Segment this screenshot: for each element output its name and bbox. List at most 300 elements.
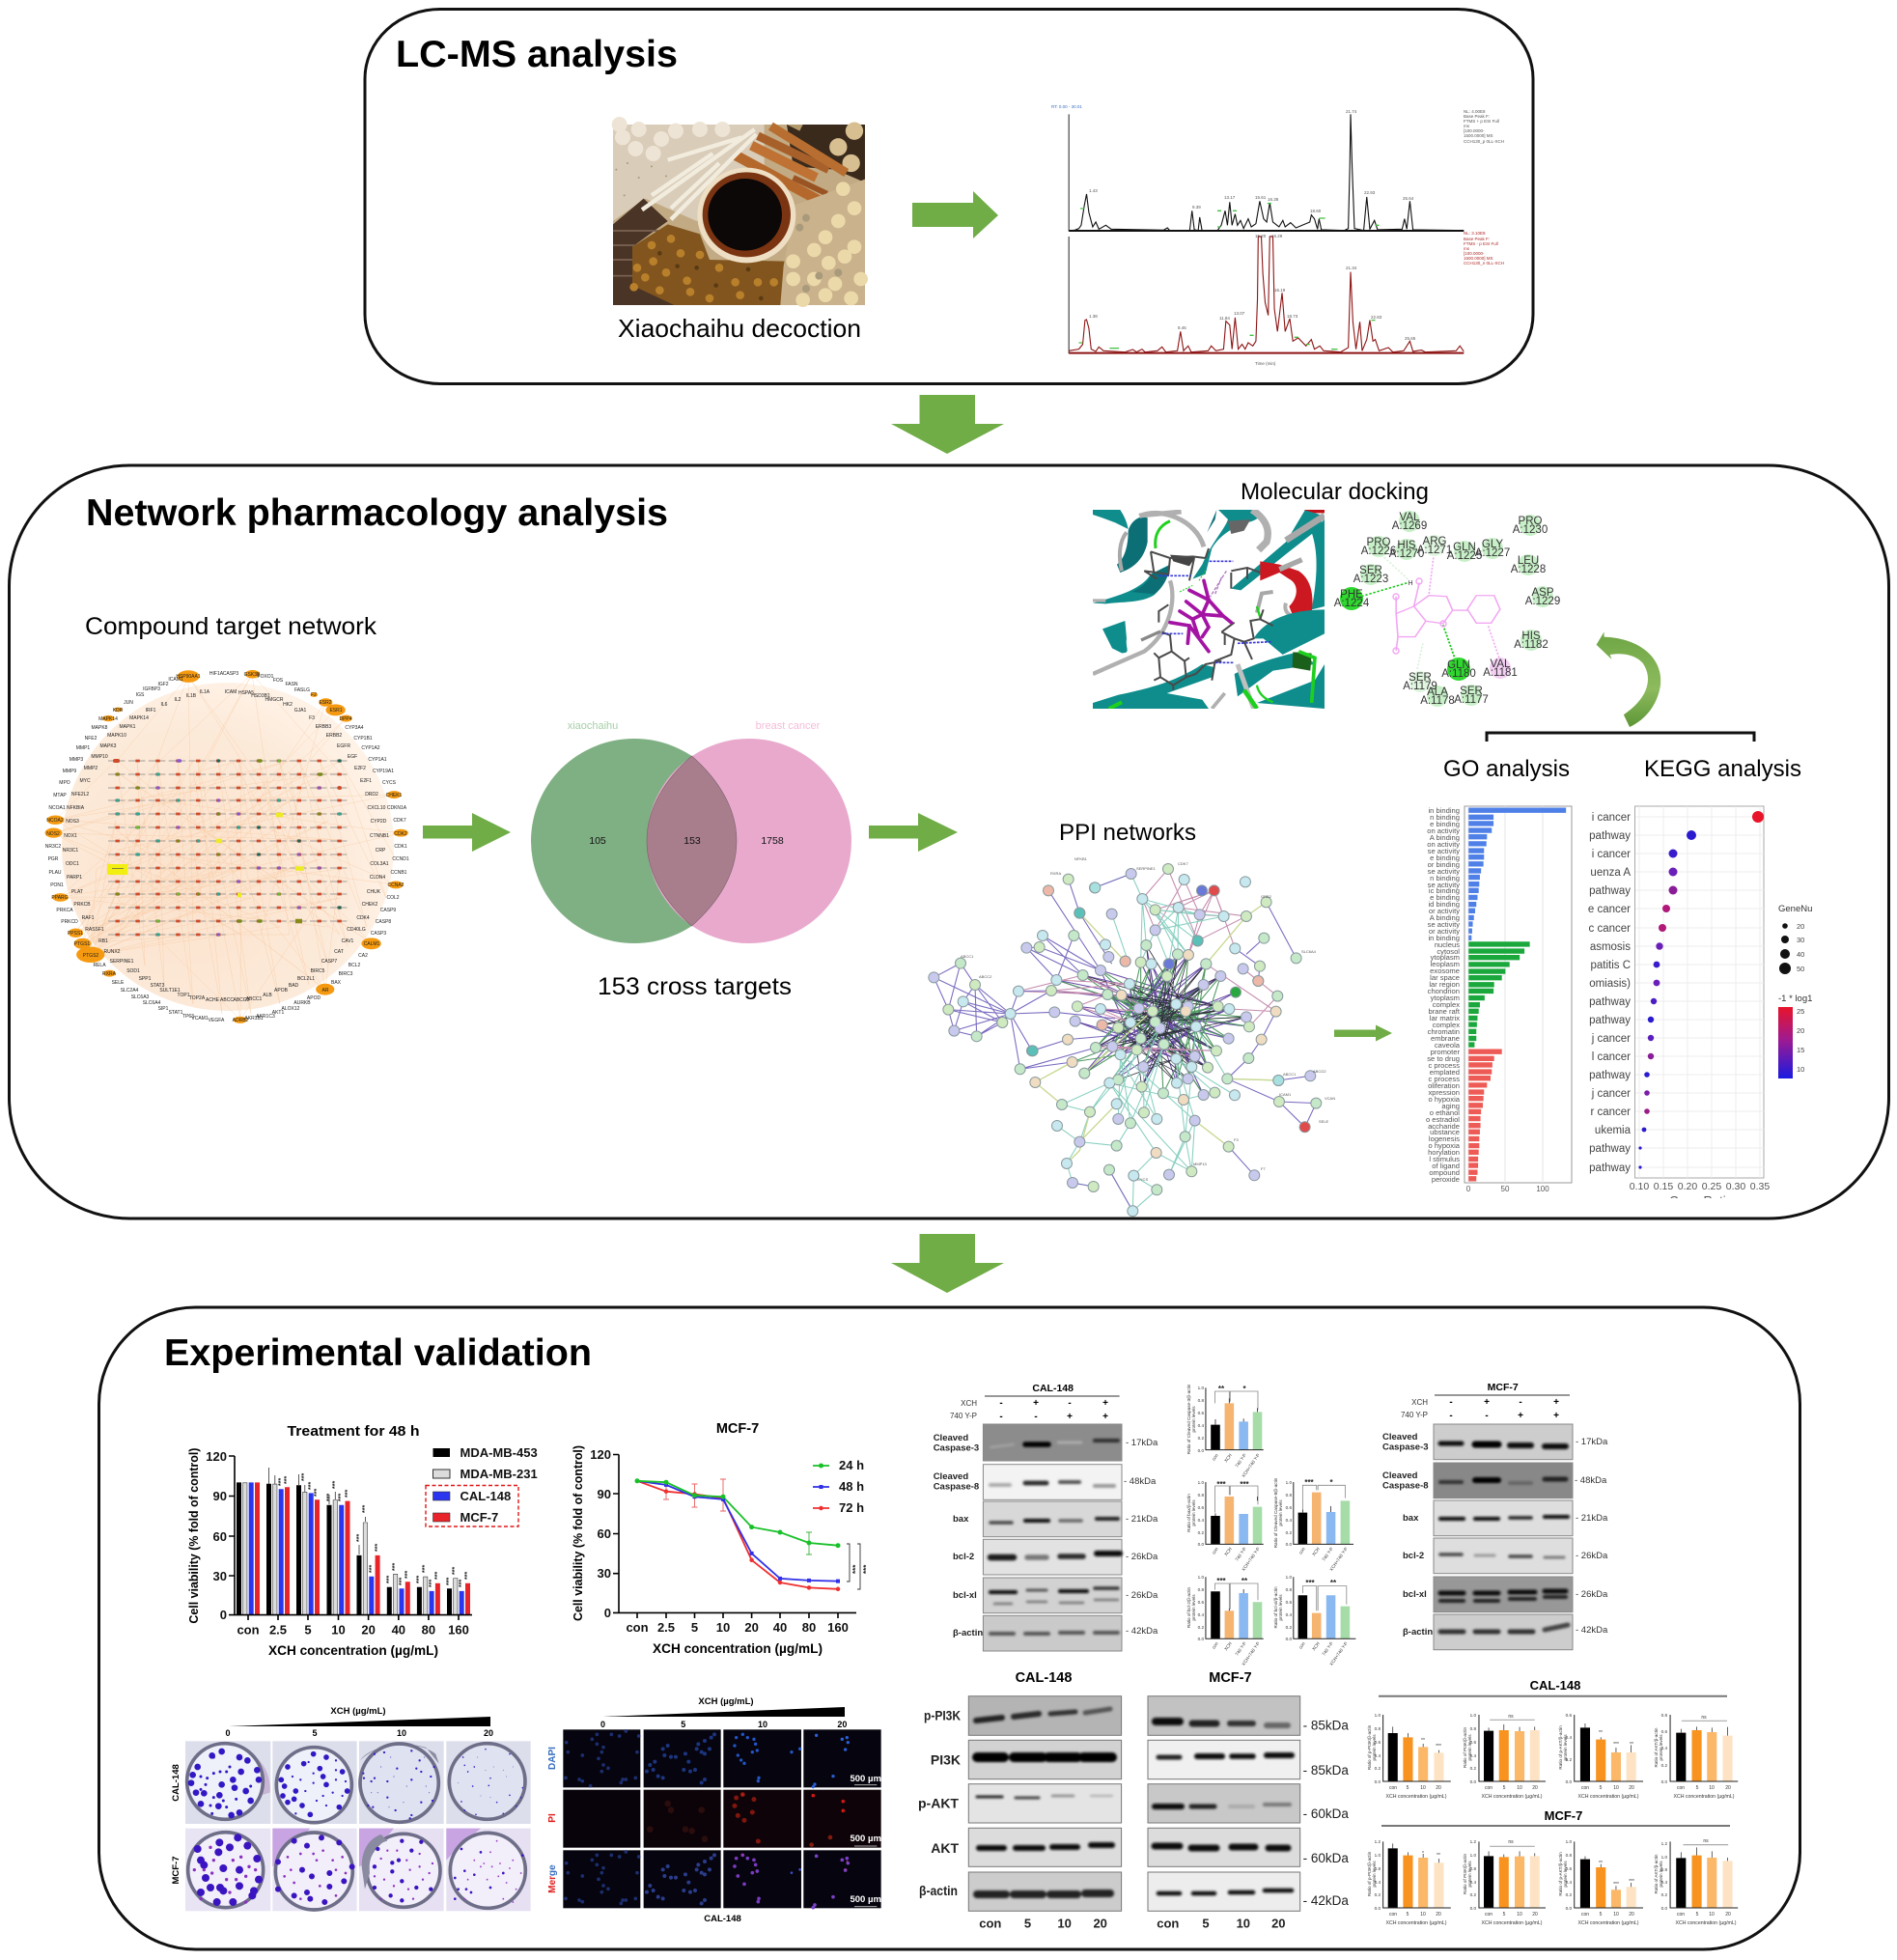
chart: KEGG dot plot: 0.20 (1678, 1181, 1697, 1192)
chart: apoptosis protein ratio bars: 0.8 (1286, 1587, 1292, 1592)
chart: PI3K/AKT protein ratio bars: 0.2 (1661, 1892, 1667, 1897)
legend: colour scale: 25 (1797, 1007, 1804, 1016)
arrow: herbs to chromatogram (912, 191, 998, 238)
figure: DAPI and PI fluorescence staining: 0 (600, 1720, 605, 1729)
chart: PI3K/AKT protein ratio bars: 1.2 (1661, 1841, 1667, 1846)
chart: PI3K/AKT protein ratio bars: 0.0 (1661, 1779, 1667, 1784)
chart: PI3K/AKT protein ratio bars: Ratio of PI3K/β-actin (1463, 1726, 1467, 1768)
figure: western blot MCF-7, caspase panel: - (1485, 1411, 1489, 1421)
chart: PI3K/AKT protein ratio bars: 0.8 (1375, 1726, 1381, 1731)
figure: colony formation plates: 5 (312, 1728, 318, 1738)
chart: GO bar chart: accharide (1428, 1122, 1460, 1131)
chart: apoptosis protein ratio bars: 0.2 (1198, 1436, 1204, 1441)
figure: western blot CAL-148 and MCF-7, PI3K/AKT: - 85kDa (1303, 1763, 1349, 1778)
chart: apoptosis protein ratio bars: 0.0 (1198, 1448, 1204, 1453)
chart: LC-MS chromatograms: 8.45 (1178, 325, 1186, 330)
chart: compound target network: RUNX2 (104, 949, 121, 955)
chart: GO bar chart: caveola (1435, 1041, 1461, 1050)
diagram: 2D ligand interactions: HIS (1521, 630, 1541, 642)
diagram: 2D ligand interactions: A:1180 (1441, 668, 1476, 680)
chart: KEGG dot plot: 0.30 (1726, 1181, 1745, 1192)
chart: PI3K/AKT protein ratio bars: Ratio of AKT/β-actin (1654, 1727, 1659, 1767)
chart: compound target network: MMP3 (70, 757, 83, 763)
chart: PI3K/AKT protein ratio bars: *** (1436, 1744, 1441, 1750)
chart: compound target network: IRF1 (146, 708, 156, 714)
chart: PPI network: ABCC1 (1283, 1072, 1297, 1077)
chart: apoptosis protein ratio bars: 0.8 (1198, 1587, 1204, 1592)
chart: compound target network: CTNNB1 (370, 833, 389, 839)
label: Compound target network: Compound target network (85, 613, 377, 640)
legend: colour scale: -1 * log1 (1778, 994, 1812, 1004)
chart: PPI network: NFKB1 (1074, 856, 1088, 861)
chart: KEGG dot plot: 0.35 (1750, 1181, 1770, 1192)
chart: LC-MS chromatograms: 16.19 (1274, 288, 1286, 293)
chart: compound target network: DPP4 (339, 716, 352, 722)
chart: GO bar chart: e binding (1430, 893, 1460, 902)
chart: LC-MS chromatograms: 16.38 (1268, 197, 1279, 202)
chart: compound target network: RXRA (102, 971, 117, 977)
figure: western blot CAL-148, caspase panel: 740 Y-P (950, 1412, 977, 1420)
chart: cell viability bars, 48 h: *** (375, 1544, 381, 1552)
legend: colour scale: 20 (1797, 1026, 1804, 1035)
heading: Network pharmacology analysis: Network pharmacology analysis (86, 492, 668, 534)
diagram: 2D ligand interactions: SER (1359, 565, 1382, 576)
figure: western blot MCF-7, caspase panel: - 48kDa (1575, 1475, 1607, 1486)
chart: MCF-7 viability lines (571, 1421, 871, 1656)
chart: PPI network: VCAN (1325, 1096, 1335, 1101)
chart: apoptosis protein ratio bars: 1.0 (1198, 1386, 1204, 1390)
chart: LC-MS chromatograms: [100.0000- (1464, 251, 1485, 256)
chart: compound target network: SOD1 (126, 968, 140, 974)
chart: cell viability bars, 48 h: *** (464, 1572, 471, 1580)
diagram: 2D ligand interactions: PRO (1519, 516, 1543, 527)
chart: compound target network: HSD3B1 (251, 693, 270, 699)
chart: MCF-7 viability lines: 40 (773, 1620, 787, 1635)
chart: PI3K/AKT protein ratio bars: protein levels (1659, 1734, 1663, 1761)
bracket: GO and KEGG (1487, 733, 1754, 742)
legend: colour scale (1778, 994, 1812, 1078)
chart: KEGG dot plot: 0.10 (1630, 1181, 1649, 1192)
chart: cell viability bars, 48 h: *** (405, 1571, 411, 1579)
chart: LC-MS chromatograms (1051, 104, 1504, 366)
chart: PI3K/AKT protein ratio bars: Ratio of p-PI3K/β-actin (1367, 1724, 1372, 1770)
figure: colony formation plates: 0 (225, 1728, 231, 1738)
chart: compound target network (45, 670, 409, 1023)
chart: compound target network: CASP9 (380, 908, 396, 913)
figure: western blot MCF-7, caspase panel: - 26kDa (1576, 1589, 1608, 1600)
chart: apoptosis protein ratio bars: Ratio of Cleaved Caspase-8/β-actin (1273, 1477, 1278, 1548)
chart: LC-MS chromatograms: 1.38 (1089, 314, 1098, 319)
figure: western blot MCF-7, caspase panel: + (1484, 1397, 1490, 1408)
chart: compound target network: CHEK2 (362, 902, 378, 908)
chart: compound target network: HMGCR (265, 697, 284, 703)
chart: LC-MS chromatograms: [100.0000- (1464, 128, 1485, 133)
chart: PPI network: SELE (1319, 1119, 1329, 1124)
chart: compound target network: CDK7 (393, 818, 406, 824)
chart: LC-MS chromatograms: 1.43 (1089, 188, 1098, 193)
chart: PI3K/AKT protein ratio bars: Ratio of p-AKT/β-actin (1558, 1852, 1563, 1896)
chart: LC-MS chromatograms: CCH130_n 0LL-XCH (1464, 261, 1504, 266)
chart: apoptosis protein ratio bars: *** (1304, 1478, 1315, 1487)
panel: Experimental validation (98, 1307, 1799, 1949)
chart: compound target network: ESR1 (329, 708, 343, 714)
chart: GO bar chart: nucleus (1435, 940, 1460, 949)
chart: compound target network: MTAP (53, 793, 67, 798)
chart: PI3K/AKT protein ratio bars: 5 (1600, 1912, 1603, 1918)
chart: compound target network: PLAU (48, 870, 62, 876)
chart: compound target network: STAT1 (169, 1010, 183, 1016)
chart: GO bar chart: c process (1429, 1061, 1460, 1070)
chart: GO bar chart: se activity (1428, 920, 1460, 929)
chart: PI3K/AKT protein ratio bars: 0.4 (1566, 1880, 1572, 1885)
chart: apoptosis protein ratio bars: protein levels (1278, 1594, 1283, 1621)
chart: compound target network: PTGS1 (74, 941, 90, 947)
chart: GO bar chart: ompound (1429, 1168, 1460, 1177)
chart: compound target network: MMP10 (91, 754, 108, 760)
chart: PI3K/AKT protein ratio bars: ** (1630, 1742, 1633, 1748)
chart: PI3K/AKT protein ratio bars: ns (1703, 1838, 1709, 1844)
chart: GO bar chart: leoplasm (1431, 960, 1460, 968)
chart: LC-MS chromatograms: 25.65 (1405, 336, 1416, 341)
label: Venn counts: 1758 (761, 835, 784, 847)
chart: PI3K/AKT protein ratio bars: 0.6 (1661, 1729, 1667, 1734)
legend: cell lines: CAL-148 (460, 1489, 511, 1503)
chart: PPI network: CYCS (1137, 1177, 1148, 1182)
panel: LC-MS analysis (365, 10, 1533, 384)
chart: MCF-7 viability lines: 24 h (839, 1458, 864, 1472)
figure: western blot MCF-7, caspase panel: - 17kDa (1576, 1437, 1608, 1447)
chart: PI3K/AKT protein ratio bars (1367, 1678, 1738, 1926)
figure: DAPI and PI fluorescence staining: 20 (837, 1720, 847, 1729)
chart: compound target network: RELA (93, 963, 106, 968)
figure: western blot CAL-148 and MCF-7, PI3K/AKT: - 42kDa (1303, 1893, 1349, 1908)
chart: MCF-7 viability lines: *** (862, 1564, 871, 1574)
chart: MCF-7 viability lines: 120 (590, 1447, 611, 1462)
chart: compound target network: HK2 (283, 702, 293, 708)
chart: PI3K/AKT protein ratio bars: con (1677, 1912, 1685, 1918)
chart: compound target network: VCAM1 (191, 1016, 209, 1022)
chart: PPI network: ICAM1 (1279, 1092, 1292, 1097)
chart: compound target network: CA2 (358, 953, 368, 959)
chart: compound target network: MAPK14 (129, 715, 149, 721)
chart: compound target network: BAD (289, 983, 299, 989)
chart: KEGG dot plot: pathway (1589, 1143, 1631, 1155)
chart: apoptosis protein ratio bars: 0.0 (1286, 1637, 1292, 1641)
figure: western blot MCF-7, caspase panel: - (1519, 1397, 1522, 1408)
chart: PI3K/AKT protein ratio bars: 0.6 (1470, 1740, 1476, 1745)
chart: LC-MS chromatograms: NL: 4.00E8 (1464, 109, 1486, 114)
legend: gene number: 40 (1797, 950, 1804, 959)
arrow: LC-MS to network pharmacology (891, 395, 1004, 454)
chart: apoptosis protein ratio bars: 0.6 (1198, 1505, 1204, 1510)
figure: western blot MCF-7, caspase panel: + (1553, 1397, 1559, 1408)
chart: MCF-7 viability lines: con (626, 1620, 649, 1635)
chart: PI3K/AKT protein ratio bars: 20 (1629, 1785, 1634, 1791)
chart: PI3K/AKT protein ratio bars: 10 (1709, 1785, 1715, 1791)
chart: cell viability bars, 48 h: *** (284, 1476, 291, 1484)
label: GO analysis: GO analysis (1443, 756, 1570, 782)
chart: PI3K/AKT protein ratio bars: Ratio of PI3K/β-actin (1463, 1853, 1467, 1894)
chart: apoptosis protein ratio bars: Ratio of bax/β-actin (1186, 1494, 1191, 1532)
chart: GO bar chart: complex (1433, 1000, 1460, 1009)
chart: KEGG dot plot (1588, 806, 1812, 1208)
chart: cell viability bars, 48 h: *** (308, 1482, 315, 1490)
chart: LC-MS chromatograms: 1500.0000] MS (1464, 133, 1493, 138)
figure: western blot MCF-7, caspase panel: β-actin (1403, 1627, 1433, 1638)
chart: apoptosis protein ratio bars: 1.0 (1198, 1575, 1204, 1580)
chart: GO bar chart: lar space (1430, 973, 1460, 982)
chart: PI3K/AKT protein ratio bars: CAL-148 (1530, 1678, 1580, 1693)
chart: compound target network: ICAM (225, 689, 237, 695)
chart: compound target network: PPSS1 (68, 931, 83, 937)
figure: western blot MCF-7, caspase panel: - (1449, 1411, 1453, 1421)
chart: MCF-7 viability lines: 80 (802, 1620, 816, 1635)
chart: compound target network: PTGS2 (83, 953, 98, 959)
chart: compound target network: SELE (112, 980, 125, 986)
chart: cell viability bars, 48 h: 90 (213, 1489, 227, 1503)
chart: PI3K/AKT protein ratio bars: 0.0 (1566, 1779, 1572, 1784)
arrow: network to Venn (423, 813, 511, 852)
diagram: 2D ligand interactions: A:1179 (1403, 681, 1437, 692)
chart: compound target network: VEGFA (209, 1018, 225, 1023)
chart: PI3K/AKT protein ratio bars: 1.0 (1470, 1853, 1476, 1858)
chart: compound target network: PGR (48, 856, 59, 862)
chart: GO bar chart (1426, 806, 1572, 1193)
chart: PI3K/AKT protein ratio bars: 5 (1696, 1785, 1699, 1791)
chart: GO bar chart: se activity (1428, 847, 1460, 855)
diagram: 2D ligand interactions: A:1177 (1454, 694, 1489, 706)
chart: cell viability bars, 48 h: *** (332, 1481, 339, 1489)
text: 153 cross targets: 153 cross targets (598, 973, 792, 1000)
chart: KEGG dot plot: c cancer (1589, 923, 1631, 935)
chart: MCF-7 viability lines: 72 h (839, 1500, 864, 1515)
image: herbs and decoction bowl (613, 125, 865, 305)
chart: compound target network: RASSF1 (85, 927, 104, 933)
figure: western blot CAL-148 and MCF-7, PI3K/AKT: 10 (1057, 1917, 1072, 1931)
chart: KEGG dot plot: patitis C (1590, 960, 1631, 971)
diagram: 2D ligand interactions: GLN (1453, 542, 1476, 553)
chart: compound target network: MAPK1 (120, 724, 136, 730)
chart: compound target network: CYP19A1 (373, 769, 394, 774)
chart: cell viability bars, 48 h: *** (345, 1490, 351, 1498)
chart: cell viability bars, 48 h (186, 1423, 538, 1658)
legend: gene number (1778, 904, 1812, 974)
chart: PI3K/AKT protein ratio bars: con (1581, 1785, 1589, 1791)
image: docking 3D structure (1093, 510, 1325, 709)
diagram: 2D ligand interactions: A:1270 (1389, 548, 1424, 560)
diagram: 2D ligand interactions (1334, 511, 1560, 707)
chart: PI3K/AKT protein ratio bars: con (1485, 1912, 1492, 1918)
chart: compound target network: NCOA2 (46, 818, 64, 824)
chart: compound target network: HSPA5 (238, 690, 254, 696)
figure: western blot CAL-148 and MCF-7, PI3K/AKT: MCF-7 (1209, 1670, 1252, 1686)
chart: apoptosis protein ratio bars: 0.6 (1198, 1411, 1204, 1415)
chart: GO bar chart: ubstance (1430, 1128, 1460, 1136)
figure: western blot MCF-7, caspase panel: - 21kDa (1576, 1513, 1608, 1524)
diagram: 2D ligand interactions: A:1182 (1514, 639, 1548, 651)
chart: apoptosis protein ratio bars: 0.8 (1198, 1398, 1204, 1403)
chart: GO bar chart: embrane (1431, 1034, 1460, 1043)
chart: compound target network: CAV1 (342, 938, 354, 944)
figure: western blot CAL-148 and MCF-7, PI3K/AKT: 20 (1093, 1917, 1107, 1931)
chart: compound target network: BCL2 (349, 963, 360, 968)
figure: western blot CAL-148, caspase panel: bax (953, 1514, 969, 1525)
label: xiaochaihu: xiaochaihu (568, 720, 618, 732)
chart: LC-MS chromatograms: 15.20 (1255, 234, 1267, 238)
chart: LC-MS chromatograms: 16.29 (1271, 234, 1283, 238)
chart: MCF-7 viability lines: 0 (604, 1606, 611, 1620)
chart: PI3K/AKT protein ratio bars: ** (1421, 1738, 1425, 1744)
figure: western blot CAL-148 and MCF-7, PI3K/AKT: con (1157, 1917, 1179, 1931)
chart: cell viability bars, 48 h: *** (338, 1494, 345, 1501)
figure: western blot MCF-7, caspase panel: MCF-7 (1488, 1382, 1519, 1393)
figure: DAPI and PI fluorescence staining: 10 (758, 1720, 767, 1729)
chart: PI3K/AKT protein ratio bars: 1.2 (1470, 1839, 1476, 1844)
chart: PI3K/AKT protein ratio bars: 0.2 (1375, 1892, 1381, 1897)
figure: western blot CAL-148 and MCF-7, PI3K/AKT: 5 (1024, 1917, 1031, 1931)
chart: compound target network: JUN (124, 700, 133, 706)
legend: gene number: 50 (1797, 965, 1804, 973)
legend: cell lines (426, 1445, 538, 1526)
chart: apoptosis protein ratio bars: protein levels (1191, 1499, 1196, 1526)
diagram: 2D ligand interactions: A:1229 (1525, 596, 1560, 607)
diagram: 2D ligand interactions: A:1227 (1475, 547, 1510, 559)
chart: apoptosis protein ratio bars: 0.6 (1286, 1505, 1292, 1510)
chart: LC-MS chromatograms: 13.17 (1224, 195, 1236, 200)
chart: GO bar chart: of ligand (1432, 1162, 1460, 1170)
figure: western blot MCF-7, caspase panel: - 26kDa (1576, 1551, 1608, 1561)
chart: apoptosis protein ratio bars: 740 Y-P (1321, 1547, 1334, 1562)
chart: apoptosis protein ratio bars: ** (1241, 1577, 1248, 1585)
chart: compound target network: TOP2A (189, 995, 206, 1001)
chart: PI3K/AKT protein ratio bars: 0.0 (1661, 1906, 1667, 1911)
chart: PI3K/AKT protein ratio bars: ** (1437, 1853, 1440, 1859)
chart: KEGG dot plot: i cancer (1592, 812, 1631, 824)
chart: PI3K/AKT protein ratio bars: *** (1629, 1879, 1634, 1885)
chart: PI3K/AKT protein ratio bars: 0.2 (1470, 1766, 1476, 1771)
figure: western blot MCF-7, caspase panel: bcl-2 (1403, 1551, 1424, 1561)
chart: PI3K/AKT protein ratio bars: ** (1599, 1861, 1603, 1866)
figure: western blot CAL-148, caspase panel: - 48kDa (1124, 1476, 1157, 1487)
chart: GO bar chart: ytoplasm (1431, 953, 1460, 962)
chart: compound target network: STAT3 (151, 983, 165, 989)
label: Molecular docking: Molecular docking (1241, 479, 1429, 505)
chart: PI3K/AKT protein ratio bars: ns (1701, 1715, 1707, 1721)
chart: PI3K/AKT protein ratio bars: 10 (1420, 1785, 1426, 1791)
chart: PI3K/AKT protein ratio bars: 0.8 (1470, 1866, 1476, 1871)
chart: LC-MS chromatograms: NL: 3.10E8 (1464, 231, 1486, 236)
figure: western blot CAL-148, caspase panel: - 42kDa (1126, 1626, 1158, 1637)
chart: apoptosis protein ratio bars: con (1211, 1640, 1219, 1650)
chart: LC-MS chromatograms: ms (1464, 124, 1470, 128)
chart: compound target network: GJA1 (294, 708, 306, 714)
chart: PI3K/AKT protein ratio bars: 20 (1436, 1912, 1441, 1918)
chart: cell viability bars, 48 h: *** (459, 1580, 465, 1587)
chart: PI3K/AKT protein ratio bars: 0.8 (1661, 1713, 1667, 1718)
chart: apoptosis protein ratio bars: 0.4 (1198, 1423, 1204, 1428)
chart: PI3K/AKT protein ratio bars: 0.6 (1566, 1866, 1572, 1871)
chart: PI3K/AKT protein ratio bars: 5 (1407, 1912, 1409, 1918)
chart: PI3K/AKT protein ratio bars: con (1389, 1912, 1397, 1918)
arrow: PPI to GO (1334, 1025, 1392, 1041)
diagram: 2D ligand interactions: VAL (1400, 512, 1420, 523)
chart: PI3K/AKT protein ratio bars: * (1422, 1851, 1424, 1857)
figure: colony formation plates: XCH (µg/mL) (330, 1706, 386, 1717)
chart: LC-MS chromatograms: ms (1464, 246, 1470, 251)
chart: apoptosis protein ratio bars: Ratio of bcl-xl/β-actin (1273, 1586, 1278, 1628)
chart: apoptosis protein ratio bars: 0.8 (1286, 1493, 1292, 1498)
chart: PI3K/AKT protein ratio bars: con (1581, 1912, 1589, 1918)
chart: KEGG dot plot: i cancer (1592, 849, 1631, 860)
chart: compound target network: MMP1 (76, 745, 90, 751)
chart: GO bar chart: brane raft (1428, 1007, 1461, 1016)
chart: KEGG dot plot: l cancer (1592, 1051, 1631, 1063)
chart: compound target network: TOP1 (178, 993, 190, 998)
chart: PI3K/AKT protein ratio bars: *** (1613, 1742, 1619, 1748)
chart: cell viability bars, 48 h: XCH concentration (µg/mL) (268, 1643, 438, 1658)
chart: apoptosis protein ratio bars: XCH (1223, 1641, 1233, 1652)
figure: western blot MCF-7, caspase panel (1382, 1382, 1608, 1650)
chart: PI3K/AKT protein ratio bars: 0.0 (1470, 1906, 1476, 1911)
chart: compound target network: MAPK8 (92, 725, 108, 731)
chart: cell viability bars, 48 h: *** (434, 1572, 441, 1580)
caption: Xiaochaihu decoction: Xiaochaihu decoction (618, 314, 861, 343)
chart: cell viability bars, 48 h: 5 (304, 1622, 312, 1638)
chart: compound target network: PARP1 (67, 875, 82, 881)
chart: compound target network: CALM1 (364, 941, 380, 947)
chart: PI3K/AKT protein ratio bars: 0.4 (1375, 1880, 1381, 1885)
chart: PI3K/AKT protein ratio bars: 0.0 (1566, 1906, 1572, 1911)
chart: GO bar chart: se activity (1428, 881, 1460, 889)
chart: apoptosis protein ratio bars: 740 Y-P (1234, 1453, 1247, 1469)
chart: PI3K/AKT protein ratio bars: 10 (1709, 1912, 1715, 1918)
chart: compound target network: ABCC (220, 997, 234, 1003)
chart: GO bar chart: 100 (1536, 1185, 1549, 1193)
figure: western blot CAL-148 and MCF-7, PI3K/AKT: PI3K (931, 1751, 961, 1767)
chart: apoptosis protein ratio bars: *** (1216, 1480, 1227, 1489)
chart: compound target network: IGFBP3 (143, 686, 160, 692)
chart: cell viability bars, 48 h: 60 (213, 1529, 227, 1544)
chart: GO bar chart: logenesis (1429, 1134, 1460, 1143)
chart: compound target network: CAT (334, 949, 344, 955)
chart: MCF-7 viability lines: 2.5 (657, 1620, 675, 1635)
chart: compound target network: IGS (136, 692, 145, 698)
chart: apoptosis protein ratio bars (1186, 1384, 1355, 1666)
diagram: 2D ligand interactions: GLN (1447, 659, 1470, 671)
chart: compound target network: EGF (348, 754, 357, 760)
figure: western blot CAL-148, caspase panel: - (1068, 1398, 1072, 1409)
chart: compound target network: ESR2 (319, 700, 332, 706)
chart: compound target network: APOB (274, 988, 289, 994)
chart: apoptosis protein ratio bars: protein levels (1191, 1406, 1196, 1433)
chart: compound target network: EGFR (337, 743, 350, 749)
chart: LC-MS chromatograms: FTMS + p ESI Full (1464, 119, 1499, 124)
chart: compound target network: FASLG (294, 687, 310, 693)
chart: KEGG dot plot: 0.25 (1702, 1181, 1721, 1192)
chart: PI3K/AKT protein ratio bars: protein levels (1372, 1861, 1377, 1888)
chart: PI3K/AKT protein ratio bars: 0.2 (1566, 1892, 1572, 1897)
chart: MCF-7 viability lines: 10 (716, 1620, 730, 1635)
heading: Experimental validation: Experimental validation (164, 1332, 592, 1374)
chart: PI3K/AKT protein ratio bars: 1.0 (1661, 1855, 1667, 1860)
figure: western blot MCF-7, caspase panel: Caspase-8 (1382, 1481, 1429, 1491)
chart: compound target network: APOD (307, 995, 321, 1001)
chart: compound target network: NR3C1 (63, 848, 78, 854)
legend: cell lines: MDA-MB-453 (460, 1445, 538, 1460)
figure: colony formation plates: CAL-148 (171, 1764, 181, 1802)
chart: GO bar chart: o hypoxia (1428, 1095, 1461, 1104)
chart: PI3K/AKT protein ratio bars: con (1485, 1785, 1492, 1791)
